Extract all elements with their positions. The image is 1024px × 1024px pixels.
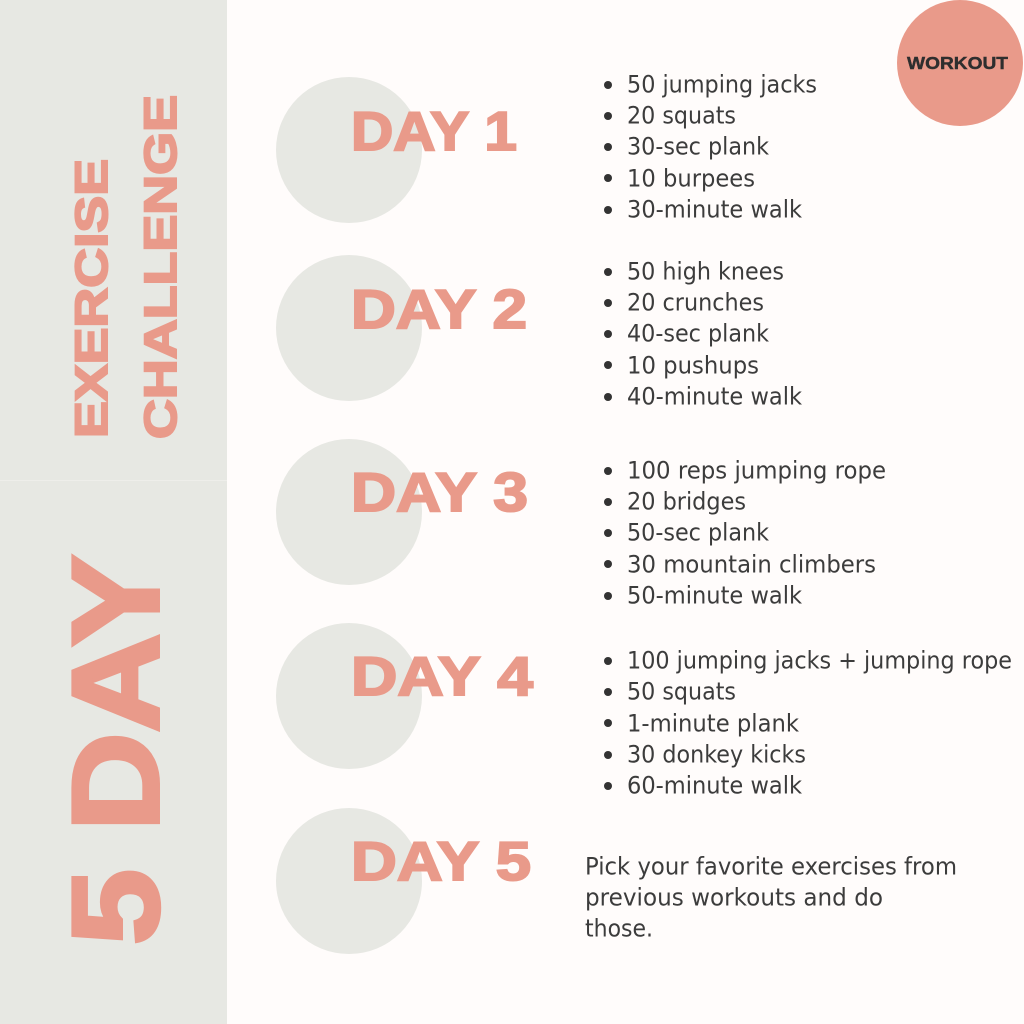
list: day 3 exercises bbox=[604, 456, 886, 609]
list: day 3 exercises: 50-sec plank bbox=[627, 518, 769, 546]
icon: day 5 circle bbox=[276, 808, 422, 954]
panel: day 4 bbox=[276, 623, 1012, 799]
list: day 3 exercises: 50-minute walk bbox=[627, 581, 802, 609]
list: day 1 exercises: 50 jumping jacks bbox=[627, 70, 817, 98]
list: day 4 exercises bbox=[604, 646, 1012, 799]
list: day 1 exercises: 30-minute walk bbox=[627, 195, 802, 223]
title line: 5 day: 5 DAY bbox=[48, 555, 185, 945]
list: day 2 exercises: 40-minute walk bbox=[627, 382, 802, 410]
heading: day 3: DAY 3 bbox=[351, 461, 528, 523]
list: day 3 exercises: 30 mountain climbers bbox=[627, 550, 876, 578]
list: day 2 exercises: 40-sec plank bbox=[627, 319, 769, 347]
list: day 4 exercises: 30 donkey kicks bbox=[627, 740, 806, 768]
list: day 1 exercises: 30-sec plank bbox=[627, 132, 769, 160]
list: day 2 exercises: 50 high knees bbox=[627, 257, 784, 285]
text block: day 5 instructions: Pick your favorite exercises from bbox=[585, 852, 957, 880]
list: day 3 exercises: 20 bridges bbox=[627, 487, 746, 515]
list: day 2 exercises: 10 pushups bbox=[627, 351, 759, 379]
heading: day 2: DAY 2 bbox=[351, 278, 527, 340]
icon: day 4 circle bbox=[276, 623, 422, 769]
list: day 2 exercises bbox=[604, 257, 802, 410]
title line: challenge: CHALLENGE bbox=[135, 95, 186, 439]
list: day 4 exercises: 60-minute walk bbox=[627, 771, 802, 799]
title line: exercise: EXERCISE bbox=[66, 159, 117, 438]
list: day 1 exercises bbox=[604, 70, 817, 223]
list: day 1 exercises: 10 burpees bbox=[627, 164, 755, 192]
list: day 4 exercises: 50 squats bbox=[627, 677, 736, 705]
panel: day 3 bbox=[276, 439, 886, 609]
heading: day 1: DAY 1 bbox=[351, 100, 517, 162]
text block: day 5 instructions bbox=[585, 852, 957, 942]
list: day 4 exercises: 1-minute plank bbox=[627, 709, 799, 737]
icon: day 1 circle bbox=[276, 77, 422, 223]
heading: day 5: DAY 5 bbox=[351, 830, 531, 892]
panel: day 2 bbox=[276, 255, 802, 410]
list: day 1 exercises: 20 squats bbox=[627, 101, 736, 129]
text block: day 5 instructions: previous workouts and do bbox=[585, 883, 883, 911]
icon: day 2 circle bbox=[276, 255, 422, 401]
icon: day 3 circle bbox=[276, 439, 422, 585]
panel: day 1 bbox=[276, 70, 817, 223]
title: exercise challenge and 5 day bbox=[48, 95, 186, 945]
panel: day 5 bbox=[276, 808, 957, 954]
badge: workout bbox=[897, 0, 1023, 126]
panel: left sidebar bbox=[0, 0, 227, 1024]
list: day 2 exercises: 20 crunches bbox=[627, 288, 764, 316]
heading: day 4: DAY 4 bbox=[351, 645, 533, 707]
list: day 3 exercises: 100 reps jumping rope bbox=[627, 456, 886, 484]
text block: day 5 instructions: those. bbox=[585, 914, 653, 942]
badge: workout: WORKOUT bbox=[907, 53, 1008, 73]
